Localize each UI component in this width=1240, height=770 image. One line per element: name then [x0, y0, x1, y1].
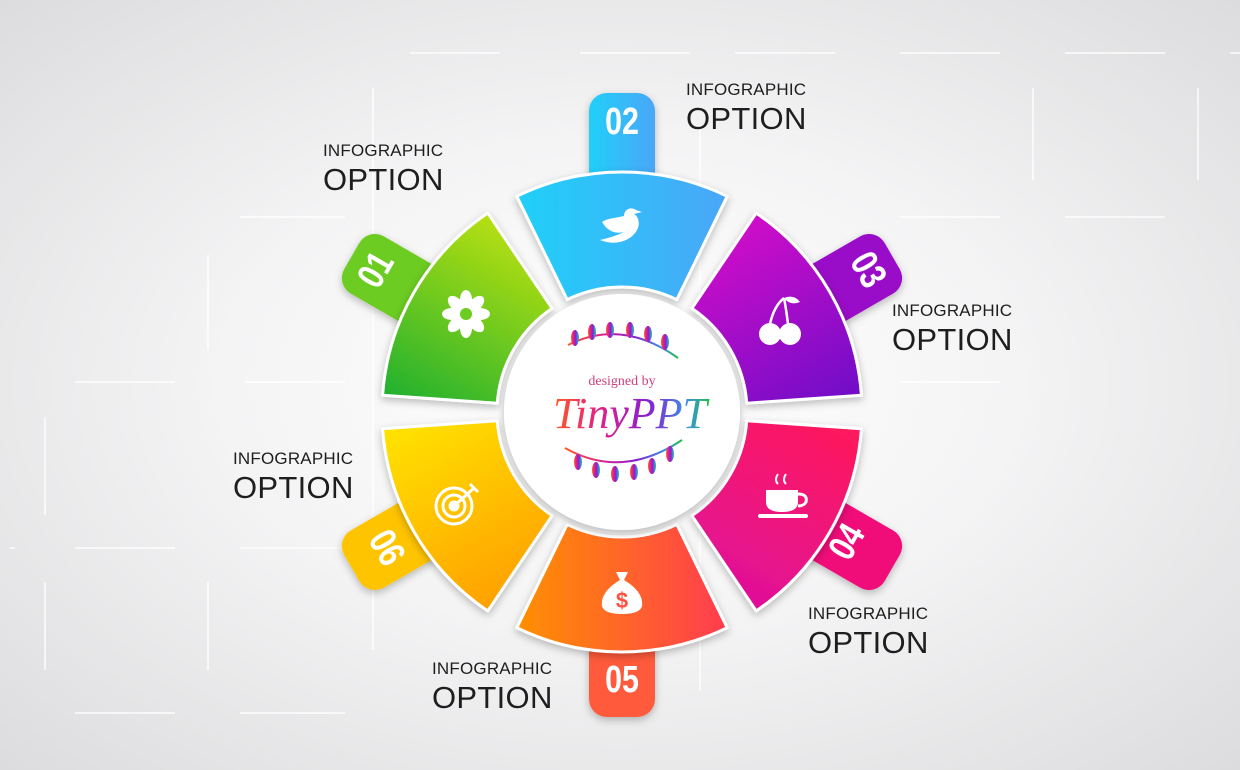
- numbers: 02: [605, 101, 639, 143]
- label 01: INFOGRAPHIC: [323, 141, 443, 160]
- label 04: INFOGRAPHIC: [808, 604, 928, 623]
- logo: designed by: [588, 374, 656, 389]
- label 03: OPTION: [892, 322, 1013, 357]
- icon: bird: [600, 208, 642, 243]
- icon: money bag: [602, 572, 642, 614]
- numbers: 05: [605, 659, 639, 701]
- icon: cherry: [759, 297, 801, 345]
- label 03: [892, 301, 1013, 357]
- label 03: INFOGRAPHIC: [892, 301, 1012, 320]
- icon: target: [436, 484, 478, 524]
- numbers: 04: [820, 517, 874, 567]
- label 05: OPTION: [432, 680, 553, 715]
- logo: [553, 322, 711, 482]
- segments: [362, 172, 882, 652]
- center circle: [504, 294, 740, 530]
- tabs: [335, 93, 909, 717]
- numbers: 06: [360, 523, 413, 573]
- numbers: 01: [349, 245, 403, 295]
- label 02: INFOGRAPHIC: [686, 80, 806, 99]
- wheel: [335, 93, 909, 717]
- label 05: INFOGRAPHIC: [432, 659, 552, 678]
- logo: TinyPPT: [553, 389, 711, 438]
- label 06: [233, 449, 354, 505]
- label 01: OPTION: [323, 162, 444, 197]
- label 06: INFOGRAPHIC: [233, 449, 353, 468]
- label 02: [686, 80, 807, 136]
- numbers: 03: [841, 245, 895, 295]
- label 01: [323, 141, 444, 197]
- icon: flower: [442, 290, 490, 338]
- label 05: [432, 659, 553, 715]
- icon: money bag: $: [616, 588, 628, 613]
- label 04: OPTION: [808, 625, 929, 660]
- label 02: OPTION: [686, 101, 807, 136]
- label 06: OPTION: [233, 470, 354, 505]
- label 04: [808, 604, 929, 660]
- numbers: [349, 101, 895, 701]
- icon: cup: [758, 474, 808, 518]
